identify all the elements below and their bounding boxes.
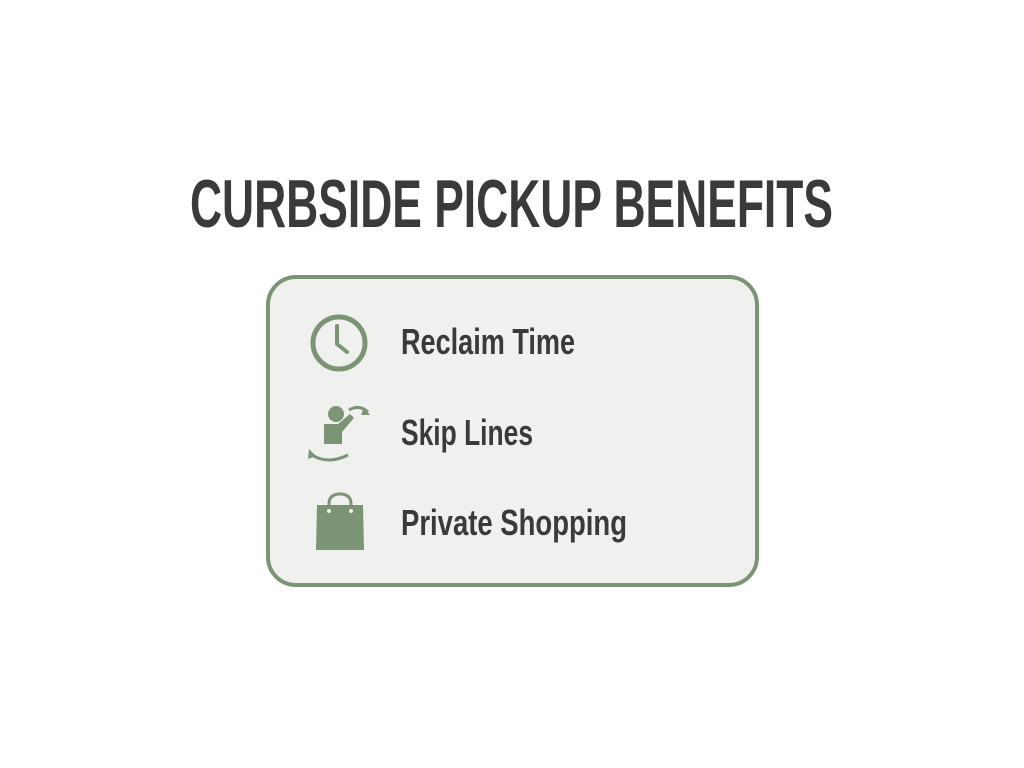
icon: person skipping line (308, 406, 370, 460)
icon: shopping bag (316, 494, 364, 550)
text: Private Shopping: Private Shopping (401, 502, 627, 543)
text: Skip Lines: Skip Lines (401, 412, 533, 453)
text: Reclaim Time: Reclaim Time (401, 321, 575, 362)
panel: benefits list (268, 277, 757, 585)
icon: clock (313, 317, 365, 369)
